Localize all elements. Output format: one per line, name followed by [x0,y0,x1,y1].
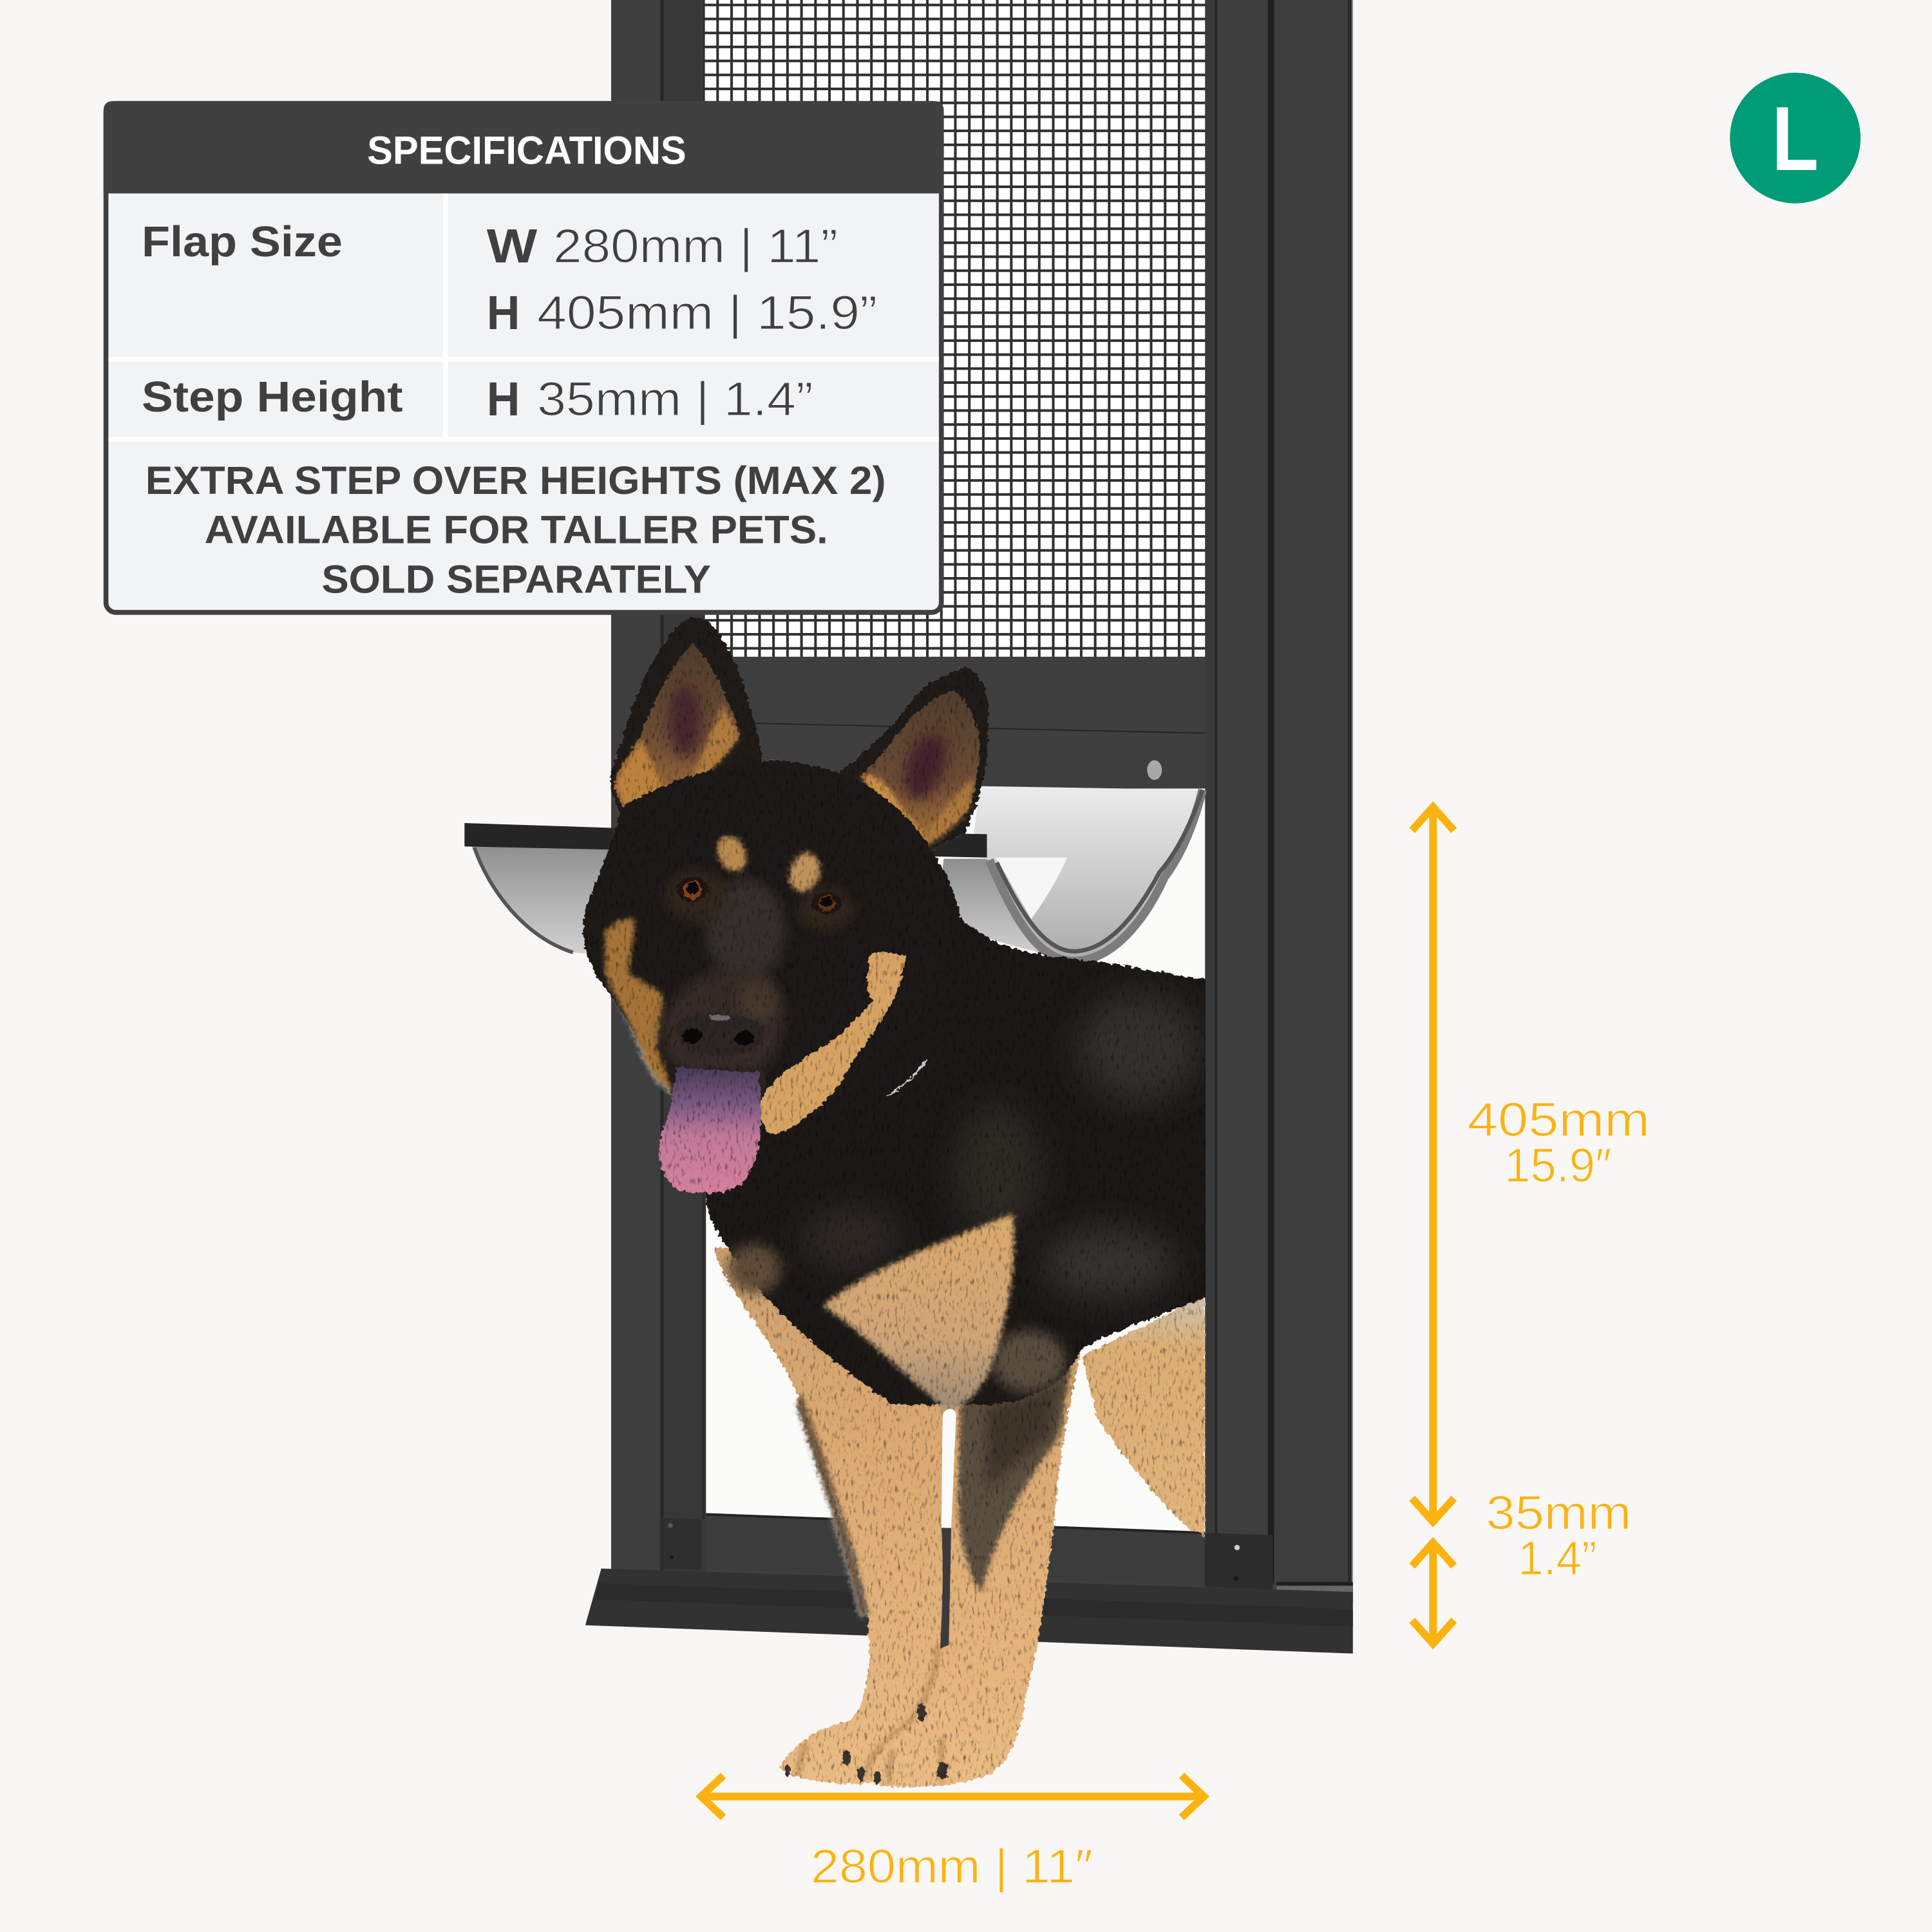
bottom rail [706,1514,1205,1584]
inner left stile [661,0,706,1577]
dimension label: step height [1486,1485,1631,1585]
door frame [585,0,1353,1654]
arrow: flap width [701,1776,1204,1817]
black torso [705,851,1206,1406]
eye sockets [665,871,727,920]
pet flap [464,786,1202,962]
heading: SPECIFICATIONS [367,128,687,172]
sill [585,1569,1353,1654]
note: EXTRA STEP OVER HEIGHTS (MAX 2) [146,459,886,502]
paw separations [799,1645,943,1784]
arrow: flap height [1412,807,1454,1522]
dog [583,616,1208,1787]
row: flap size: Flap Size [142,218,343,266]
badge: size L [1730,73,1861,204]
flap rim outer [989,790,1202,961]
row: step height: H [487,372,520,426]
right post [1205,0,1216,1533]
row: step height: 35mm | 1.4” [537,372,813,426]
badge: size L: L [1772,88,1819,190]
row: step height: Step Height [142,373,403,421]
nose [676,1014,764,1056]
chest patch [823,1214,1014,1410]
right post bottom strip [1276,1582,1353,1586]
flap bar [464,823,987,858]
rail line [752,723,1205,733]
table panel [106,104,942,612]
flap screw [1147,760,1162,780]
row: flap size [142,218,877,339]
row: flap size: 405mm | 15.9” [537,285,877,339]
dimension label: step height: 35mm [1486,1485,1631,1539]
row: flap size: H [487,285,520,339]
right ear [838,666,990,851]
opening seen through flap [996,858,1067,919]
right edge strip [1348,0,1352,1584]
flap opening [706,788,1205,1533]
left ear [611,616,764,819]
dimension label: flap height: 15.9″ [1504,1138,1612,1192]
screws [1235,1545,1240,1550]
clear flap back part [973,786,1202,962]
dimension label: step height: 1.4” [1518,1531,1597,1585]
face sheen [706,878,785,982]
tongue [659,1067,761,1193]
collar [887,1059,927,1097]
leg shading [958,1343,1074,1592]
note: AVAILABLE FOR TALLER PETS. [205,508,828,552]
eyebrow spots [712,831,752,876]
toenails [784,1703,947,1785]
dimension label: flap width: 280mm | 11″ [811,1839,1093,1893]
hind leg [1082,1296,1205,1535]
dimension label: flap height: 405mm [1468,1092,1650,1146]
note [146,459,886,601]
mouth [673,1067,766,1109]
arrow: step height [1412,1542,1454,1643]
eyes [676,877,842,914]
muzzle [661,969,784,1074]
head [583,761,949,1133]
row: step height [142,372,813,426]
table header [104,101,944,193]
gap between legs [940,1409,956,1649]
corner brackets [661,1518,701,1570]
right cheek [759,952,905,1133]
door stiles and top rail [611,0,1353,1602]
dimension label: flap height [1468,1092,1650,1192]
row: flap size: W [487,219,538,273]
row: flap size: 280mm | 11” [553,219,838,273]
flap left half [472,846,616,955]
dividers [443,193,448,439]
note: SOLD SEPARATELY [321,557,711,601]
front legs [712,1247,1084,1787]
left cheek [605,918,674,1094]
flap front centre [936,859,1047,955]
mesh screen [703,0,1205,657]
specifications table [104,101,944,612]
flap rim inner [997,790,1202,951]
fur highlights [1078,992,1201,1103]
